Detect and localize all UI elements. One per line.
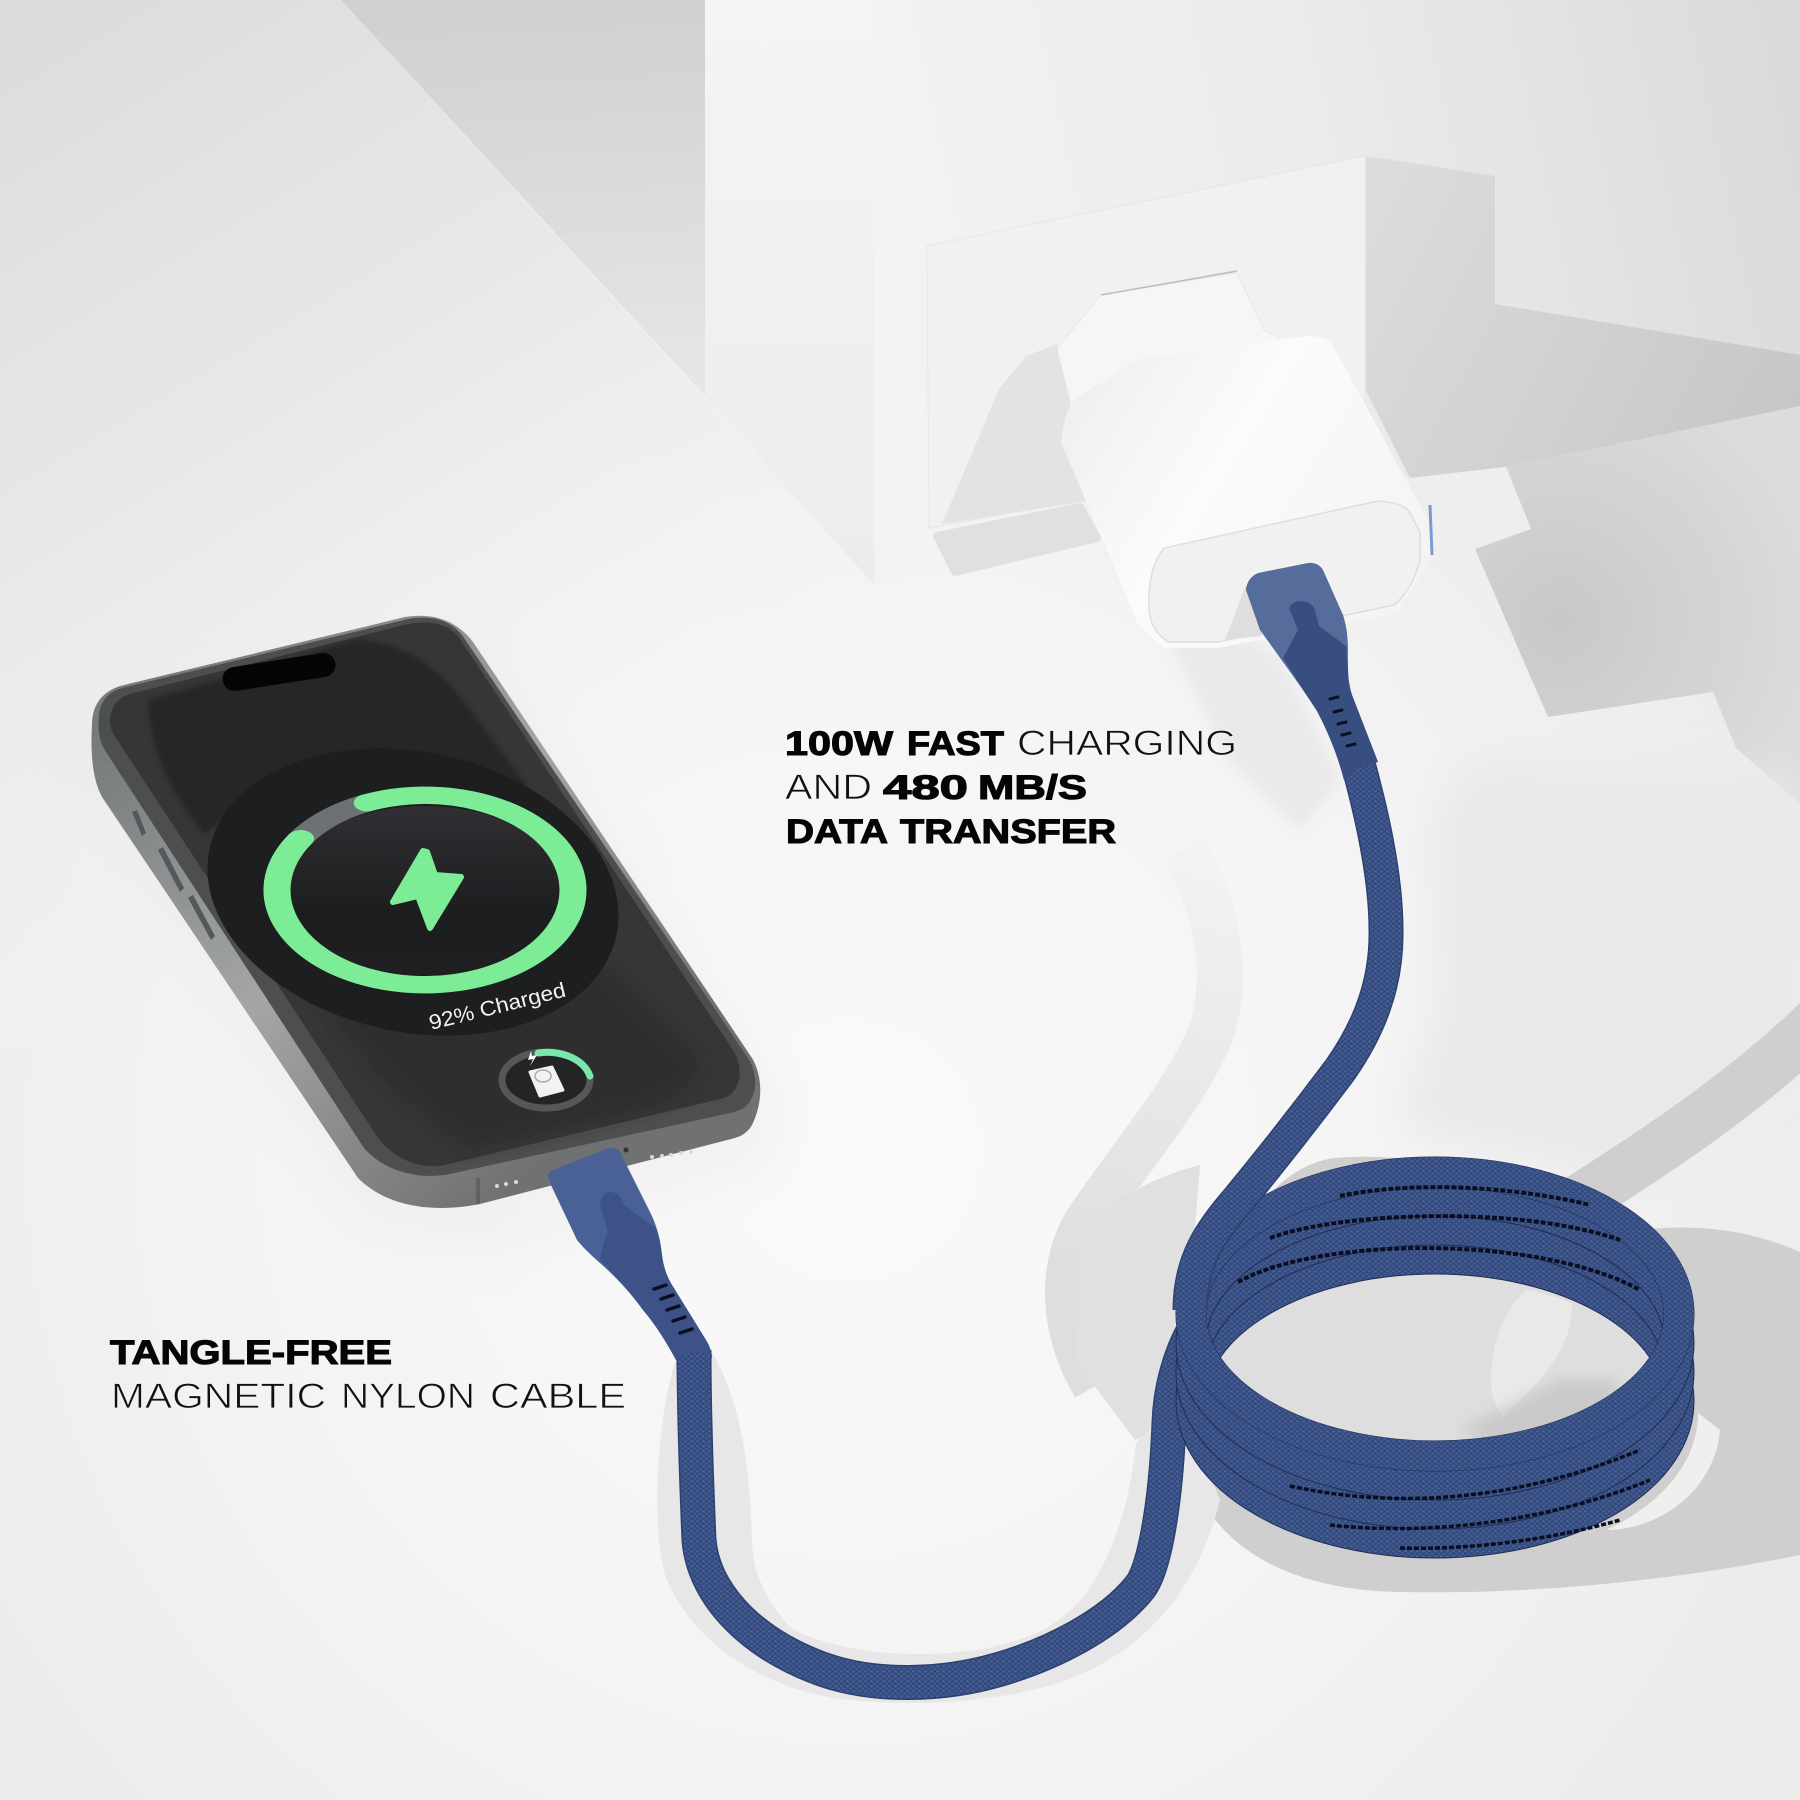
phone bezel (99, 618, 755, 1176)
battery text: 92% Charged (427, 979, 568, 1035)
callout: charging and data (785, 724, 1237, 851)
phone connector (548, 1148, 712, 1360)
callout: charging and data: 480 (883, 769, 968, 807)
charger plug block (1057, 273, 1290, 410)
phone screen (110, 622, 740, 1166)
dynamic island (221, 651, 337, 693)
callout: charging and data: CHARGING (1017, 724, 1237, 763)
wall plate shadow on the right (1366, 156, 1800, 804)
callout: charging and data: TRANSFER (900, 813, 1116, 851)
wall charger (1057, 271, 1432, 648)
callout: tangle-free: TANGLE-FREE (110, 1334, 392, 1372)
smartphone (92, 616, 760, 1208)
cable coil (1191, 1172, 1679, 1548)
strain relief vents (1330, 697, 1355, 746)
wall socket plate (927, 156, 1365, 528)
accessory charge indicator (502, 1051, 590, 1108)
callout: charging and data: FAST (907, 725, 1004, 763)
screen wallpaper shapes (148, 640, 700, 1150)
callout: charging and data: AND (785, 768, 872, 807)
charger connector (1246, 563, 1378, 780)
callout: tangle-free: CABLE (490, 1377, 626, 1416)
phone ground halo (60, 620, 790, 1260)
charger front face (1149, 501, 1420, 642)
side buttons (132, 810, 215, 940)
callout: tangle-free (110, 1334, 626, 1416)
charger body (1061, 336, 1431, 648)
callout: charging and data: DATA (786, 813, 888, 851)
upper cable run (1190, 760, 1386, 1310)
strain relief vents (654, 1285, 692, 1333)
charger shadows on wall and floor (937, 344, 1340, 830)
lower cable run (694, 1320, 1200, 1683)
callout: charging and data: 100W (785, 725, 894, 763)
callout: charging and data: MB/S (978, 769, 1087, 807)
cable shadows on the floor (657, 760, 1800, 1703)
lightning bolt (393, 851, 461, 928)
callout: tangle-free: MAGNETIC (111, 1377, 326, 1416)
callout: tangle-free: NYLON (341, 1377, 475, 1416)
charging ring (231, 766, 619, 1014)
phone frame side (92, 616, 760, 1208)
bottom edge details (476, 1148, 693, 1204)
